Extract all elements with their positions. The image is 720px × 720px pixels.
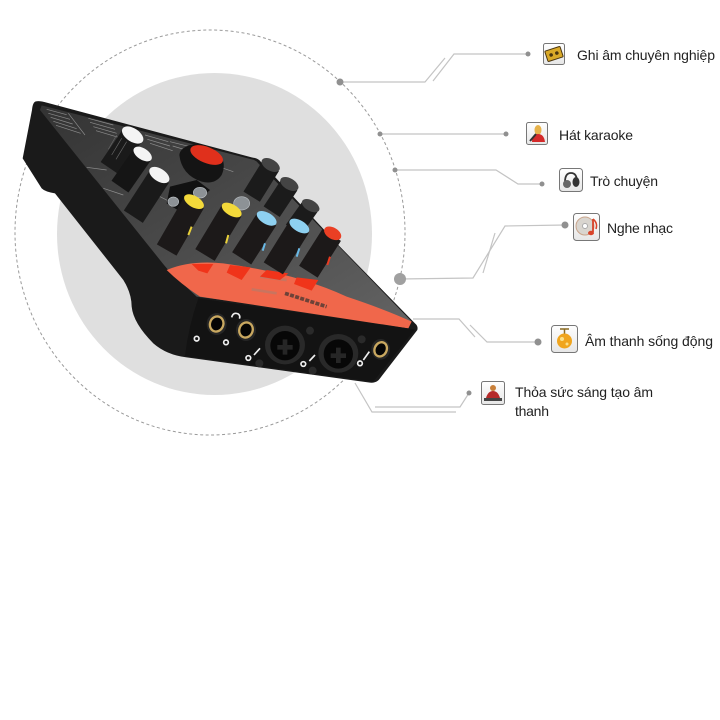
icon: cassette tape: [544, 44, 564, 64]
knob reflections: [192, 264, 318, 291]
icon: headphones: [560, 168, 582, 192]
connector: Thỏa sức sáng tạo: [355, 383, 472, 412]
combo XLR sockets: [265, 326, 358, 373]
connector: Âm thanh sống động: [413, 319, 542, 346]
label: Âm thanh sống động: [585, 333, 713, 349]
rear dark knobs: [252, 155, 322, 230]
big red knob: [167, 141, 226, 213]
clear buttons: [168, 187, 250, 210]
connector: Trò chuyện: [392, 168, 544, 186]
front screws and icons: [194, 313, 369, 375]
icon: DJ: [482, 382, 504, 404]
label: Hát karaoke: [559, 127, 633, 143]
connector: Nghe nhạc: [394, 222, 568, 285]
device body: [23, 101, 418, 383]
label: Nghe nhạc: [607, 220, 673, 236]
connector: Hát karaoke: [378, 132, 508, 136]
white knobs: [108, 123, 172, 217]
feature: Trò chuyện: [560, 168, 658, 192]
feature: Nghe nhạc: [574, 214, 673, 240]
feature: Thỏa sức sáng tạo âm thanh: [482, 382, 653, 419]
audio jacks: [207, 313, 390, 360]
strip logo marks: [252, 277, 327, 307]
icon: disco ball: [552, 326, 578, 352]
orange strip: [167, 262, 412, 328]
coloured knobs: [167, 191, 344, 272]
feature: Âm thanh sống động: [552, 326, 713, 352]
label: Ghi âm chuyên nghiệp: [577, 47, 715, 63]
label: Trò chuyện: [590, 173, 658, 189]
feature: Hát karaoke: [526, 122, 633, 144]
dashed orbit ring: [15, 30, 405, 435]
feature: Thỏa sức sáng tạo âm thanh: thanh: [515, 403, 549, 419]
audio mixer device: [23, 101, 418, 383]
front face: [185, 298, 415, 382]
top panel: [40, 105, 412, 323]
connector: Ghi âm: [336, 52, 530, 86]
icon: singer: [526, 122, 548, 144]
grey background circle: [57, 73, 372, 395]
icon: music disc: [574, 214, 600, 240]
panel printed labels: [47, 109, 233, 202]
label: Thỏa sức sáng tạo âm: [515, 384, 653, 400]
feature: Ghi âm chuyên nghiệp: [544, 44, 715, 64]
connector lines: [336, 52, 568, 412]
